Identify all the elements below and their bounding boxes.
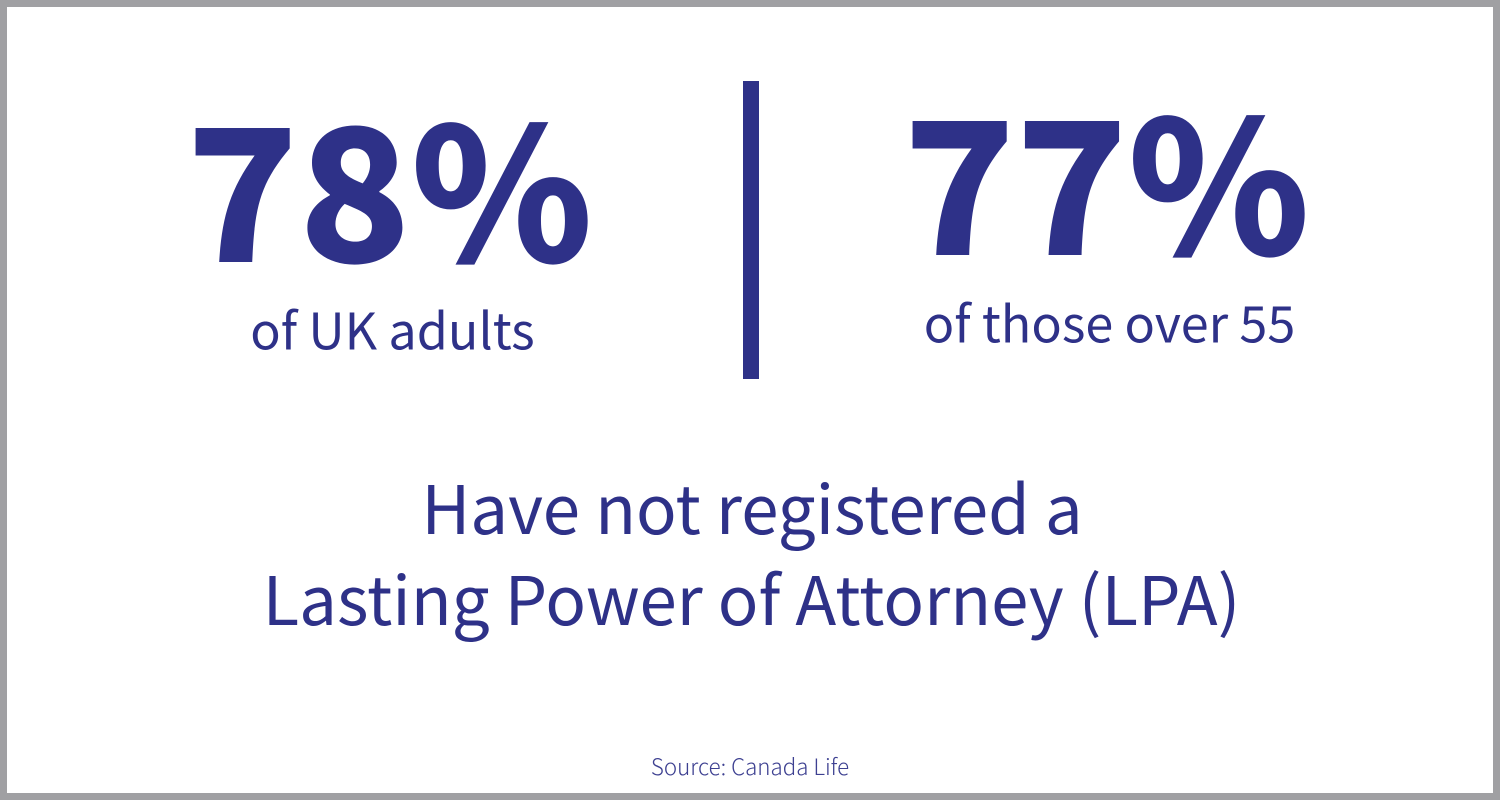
label: of UK adults: of UK adults xyxy=(250,292,535,364)
value: 78%: 78% xyxy=(186,49,593,316)
headline statement xyxy=(263,457,1240,645)
vertical divider xyxy=(743,81,759,379)
value: 77%: 77% xyxy=(903,42,1310,309)
source note: Source: Canada Life xyxy=(651,750,849,782)
headline statement: Lasting Power of Attorney (LPA) xyxy=(263,548,1240,645)
statistic: UK adults xyxy=(186,49,593,364)
label: of those over 55: of those over 55 xyxy=(924,286,1295,358)
headline statement: Have not registered a xyxy=(421,457,1083,554)
statistic: over 55 xyxy=(903,42,1310,358)
